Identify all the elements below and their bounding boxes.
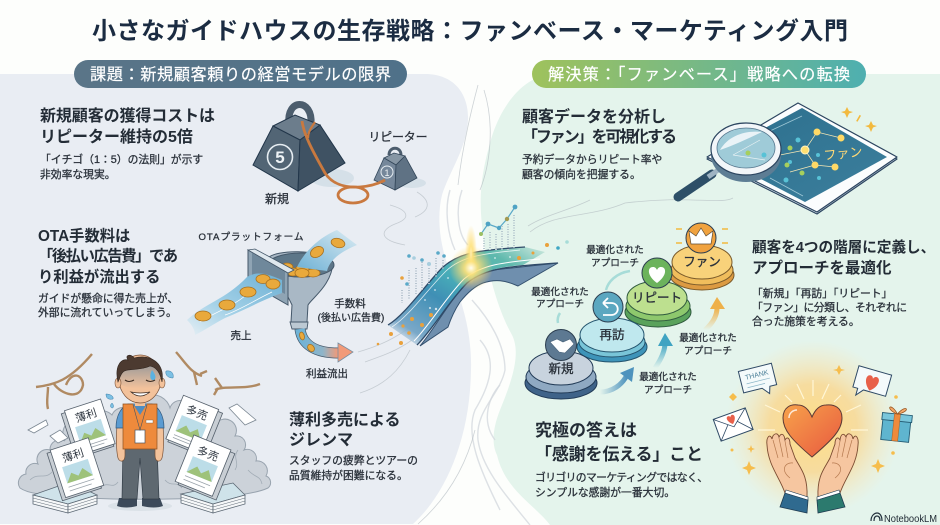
icon: heavy and light weights tied by a rope [253,104,426,203]
panel: problem background [0,74,471,524]
icon: thank-you speech bubble [738,363,778,400]
logo: NotebookLM: NotebookLM [884,514,937,525]
tier: new [525,330,597,399]
heading pill: problem [74,60,407,88]
label: OTA platform: OTAプラットフォーム [198,232,304,243]
text block: gratitude: ゴリゴリのマーケティングではなく、 [535,470,708,484]
heading pill: solution [532,60,866,88]
icon: brochure thin margin 1 [61,399,116,459]
tier: new: 新規 [548,361,574,376]
label: optimised approach A: 最適化された [531,286,589,298]
text block: OTA fees: 外部に流れていってしまう。 [38,306,177,319]
icon: broken ropes [36,352,260,409]
icon: thank-you speech bubble: THANK [745,369,770,382]
text block: OTA fees: OTA手数料は [38,227,130,245]
text block: analyse customer data: 顧客データを分析し [522,107,666,126]
icon: heavy and light weights tied by a rope: 5 [275,148,285,167]
icon: brochure high volume 1 [165,395,223,457]
icon: loose paper sheets [28,404,256,443]
label: commission: 手数料 [334,297,366,310]
tier: revisit [577,292,647,362]
label: profit outflow: 利益流出 [306,367,348,380]
title: 小さなガイドハウスの生存戦略：ファンベース・マーケティング入門 [92,17,848,45]
icon: heart speech bubble [851,366,892,403]
text block: gratitude: シンプルな感謝が一番大切。 [535,485,675,499]
icon: tablet with magnifier [678,103,897,214]
text block: OTA fees: り利益が流出する [38,268,160,286]
tier: fan: ファン [683,255,721,269]
tier: fan [670,223,734,290]
tier: repeat [625,258,691,327]
label: optimised approach B [586,244,644,269]
icon: data dots left of bridge [402,251,446,303]
text block: OTA fees [38,227,178,319]
icon: coin river through funnel [187,230,357,362]
text block: OTA fees: 「後払い広告費」であ [38,247,178,265]
text block: gratitude: 「感謝を伝える」こと [535,444,703,464]
text block: thin margin dilemma: 品質維持が困難になる。 [289,468,408,482]
tier: repeat: リピート [632,291,682,305]
icon: brochure thin margin 1: 薄利 [73,405,99,425]
label: repeater: リピーター [368,130,428,144]
icon: brochure thin margin 2 [46,438,104,501]
text block: four customer tiers: アプローチを最適化 [752,258,892,277]
text block: acquisition cost [40,106,215,181]
text block: acquisition cost: 「イチゴ（1：5）の法則」が示す [40,152,203,166]
heading pill: solution: 解決策：「ファンベース」戦略への転換 [548,66,850,84]
text block: OTA fees: ガイドが懸命に得た売上が、 [38,291,178,305]
icon: brochure high volume 2: 多売 [195,443,221,464]
text block: acquisition cost: リピーター維持の5倍 [40,128,193,146]
text block: four customer tiers: 「新規」「再訪」「リピート」 [752,287,892,300]
icon: pile of paper [18,395,271,499]
label: commission: (後払い広告費) [318,311,384,324]
label: commission [318,297,384,324]
label: optimised approach D: 最適化された [639,371,697,383]
icon: stack of brochures left [33,482,97,513]
text block: acquisition cost: 新規顧客の獲得コストは [40,106,215,125]
text block: gratitude: 究極の答えは [535,420,637,440]
text block: four customer tiers: 「ファン」に分類し、それぞれに [752,301,907,314]
text block: analyse customer data [522,107,677,181]
label: optimised approach C: アプローチ [684,346,732,357]
icon: gift box [880,406,913,442]
centre flow lines [358,85,733,525]
text block: thin margin dilemma: スタッフの疲弊とツアーの [289,453,418,467]
icon: exhausted staff member [106,355,173,511]
heading pill: problem: 課題：新規顧客頼りの経営モデルの限界 [90,65,391,84]
text block: analyse customer data: 予約データからリピート率や [522,152,662,166]
arrow: new to revisit [600,367,634,392]
text block: acquisition cost: 非効率な現実。 [40,168,116,181]
text block: thin margin dilemma [289,411,418,482]
arrow: faint curved connectors [558,271,630,323]
text block: four customer tiers: 顧客を4つの階層に定義し、 [752,239,935,256]
icon: glowing heart in hands [725,340,901,516]
label: optimised approach D: アプローチ [644,385,692,396]
text block: gratitude [535,420,708,499]
label: optimised approach C [679,332,737,357]
icon: rising line chart above bridge [479,205,517,250]
icon: brochure thin margin 2: 薄利 [60,445,86,465]
icon: brochure high volume 1: 多売 [184,402,210,423]
icon: heavy and light weights tied by a rope: 1 [384,168,390,178]
label: optimised approach A: アプローチ [536,299,584,310]
label: optimised approach D [639,371,697,396]
icon: bridge from problem to solution [377,225,569,346]
panel: solution background [481,74,940,525]
label: optimised approach B: アプローチ [591,258,639,269]
icon: sparkles beside tablet [841,107,877,132]
tier: revisit: 再訪 [599,327,625,342]
text block: analyse customer data: 「ファン」を可視化する [522,128,677,146]
label: optimised approach B: 最適化された [586,244,644,256]
icon: envelope with heart [713,408,753,441]
text block: four customer tiers: 合った施策を考える。 [752,314,860,328]
text block: thin margin dilemma: 薄利多売による [289,411,401,429]
label: optimised approach A [531,286,589,310]
icon: stack of brochures right [181,483,245,513]
arrow: repeat to fan [705,297,725,330]
icon: brochure high volume 2 [174,435,236,500]
arrow: revisit to repeat [655,333,673,368]
icon: tablet with magnifier: ファン [823,144,863,163]
label: optimised approach C: 最適化された [679,332,737,344]
text block: thin margin dilemma: ジレンマ [289,432,353,449]
text block: four customer tiers [752,239,935,328]
label: sales: 売上 [230,329,252,342]
label: new customer: 新規 [265,191,289,206]
text block: analyse customer data: 顧客の傾向を把握する。 [522,167,641,181]
